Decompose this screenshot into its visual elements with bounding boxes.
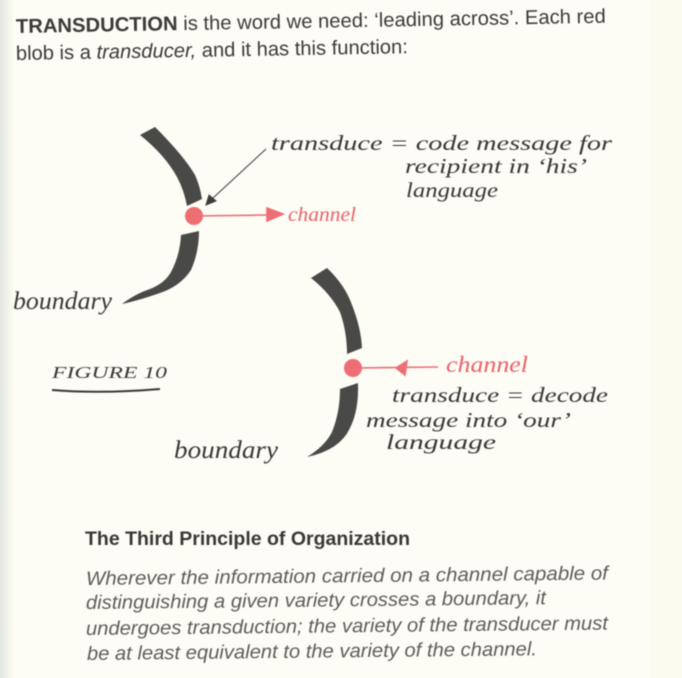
principle heading: The Third Principle of Organization — [85, 529, 410, 550]
principle text: undergoes transduction; the variety of the transducer must — [86, 613, 610, 640]
label: channel: channel — [288, 204, 356, 226]
principle text: Wherever the information carried on a channel capable of — [86, 563, 611, 590]
figure caption — [51, 363, 168, 392]
label: language: language — [386, 430, 496, 454]
principle text: be at least equivalent to the variety of the channel. — [87, 638, 537, 665]
principle text: distinguishing a given variety crosses a boundary, it — [86, 587, 548, 614]
label: boundary left: boundary — [13, 288, 113, 315]
arrow: to transducer — [206, 149, 266, 205]
boundary arc: upper left top — [140, 127, 202, 206]
boundary arc: upper left bottom — [122, 231, 199, 304]
diagram: upper transducer — [13, 127, 613, 315]
transducer blob: lower — [344, 359, 362, 377]
intro text: blob is a transducer, and it has this function: — [16, 36, 408, 65]
transducer blob: upper — [185, 207, 203, 225]
boundary arc: lower right top — [311, 268, 362, 354]
intro text — [16, 6, 606, 65]
arrow: incoming channel — [353, 361, 438, 375]
label: transduce decode: transduce = decode — [392, 383, 608, 407]
intro text: TRANSDUCTION is the word we need: ‘leading across’. Each red — [16, 6, 606, 38]
label: message: message into ‘our’ — [366, 408, 571, 432]
label: language: language — [406, 178, 498, 202]
boundary arc: lower right bottom — [307, 383, 358, 457]
label: recipient: recipient in ‘his’ — [405, 154, 587, 178]
arrow: outgoing channel — [194, 208, 283, 221]
principle text — [86, 563, 611, 665]
diagram: lower transducer — [174, 268, 608, 464]
label: channel: channel — [446, 352, 528, 377]
label: transduce code: transduce = code message for — [271, 131, 613, 155]
figure caption: FIGURE 10 — [51, 363, 168, 382]
label: boundary lower: boundary — [174, 437, 279, 464]
